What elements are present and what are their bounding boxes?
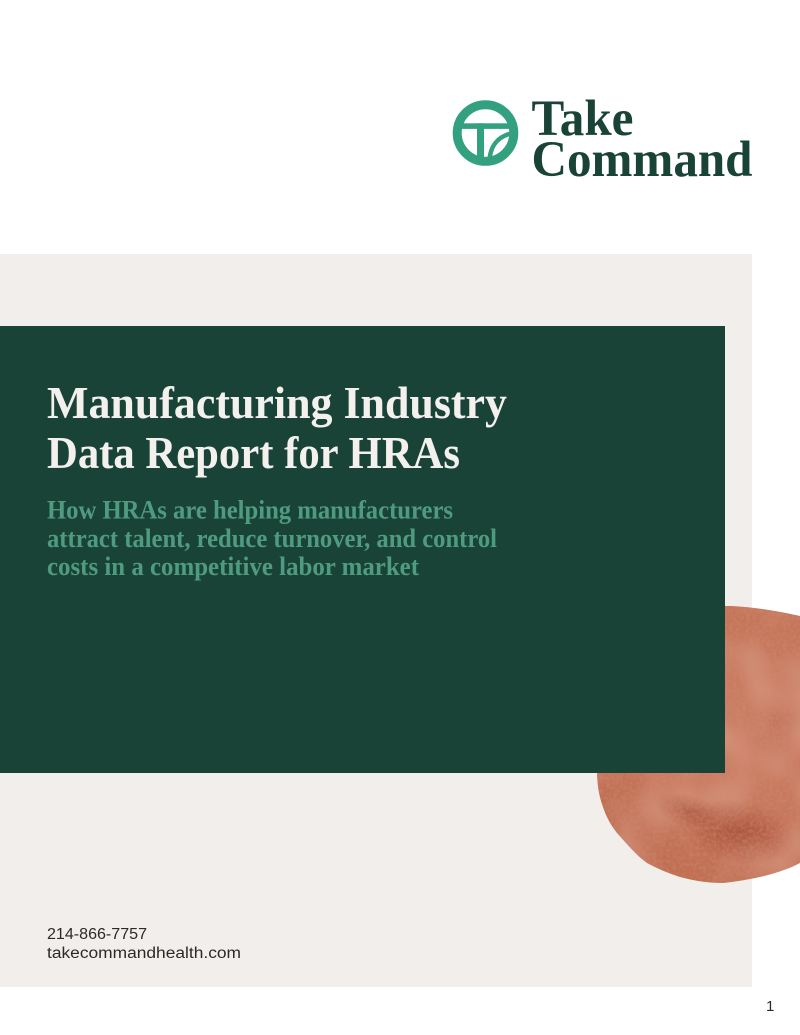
subtitle: How HRAs are helping manufacturers	[47, 496, 453, 524]
subtitle	[47, 496, 497, 581]
watercolor blob	[590, 600, 800, 890]
background panel	[0, 254, 752, 987]
title: Data Report for HRAs	[47, 427, 460, 478]
logo icon	[457, 105, 514, 161]
title	[47, 377, 507, 478]
subtitle: attract talent, reduce turnover, and control	[47, 524, 497, 553]
contact details: 214-866-7757	[47, 926, 147, 943]
logo wordmark	[532, 91, 752, 188]
logo wordmark: Take	[532, 91, 634, 147]
green title panel	[0, 326, 725, 773]
contact details: takecommandhealth.com	[47, 945, 241, 962]
title: Manufacturing Industry	[47, 377, 507, 428]
contact details	[47, 926, 241, 962]
logo: Take Command	[457, 91, 752, 188]
page number: 1	[766, 998, 774, 1015]
logo wordmark: Command	[532, 132, 752, 188]
subtitle: costs in a competitive labor market	[47, 552, 419, 581]
